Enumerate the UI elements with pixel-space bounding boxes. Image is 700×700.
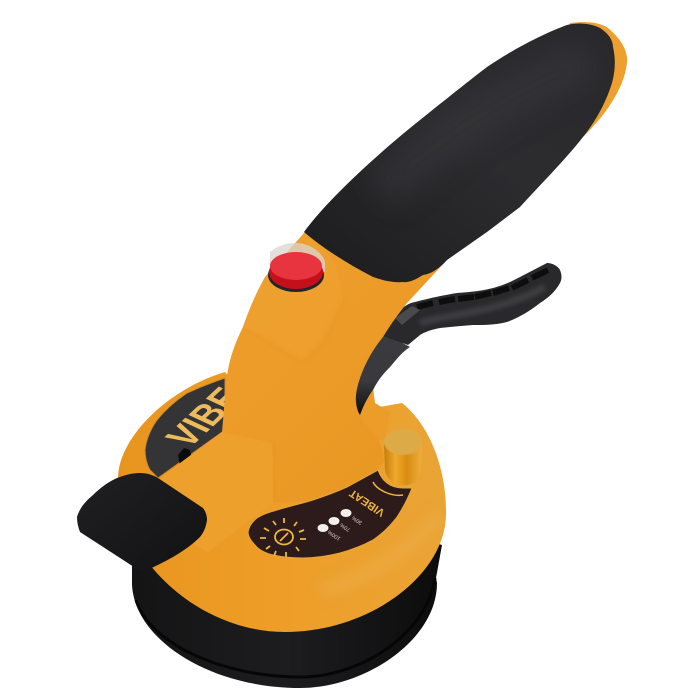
disc rim highlight xyxy=(320,515,440,590)
lever highlight xyxy=(420,287,545,323)
orange post behind neck xyxy=(356,388,390,440)
black bumper xyxy=(77,473,207,570)
grip highlight xyxy=(392,153,428,186)
neck facet xyxy=(243,232,343,362)
gold dial xyxy=(384,429,422,485)
panel brand: VIBEAT xyxy=(347,486,387,518)
glass dome xyxy=(270,243,325,272)
black grip xyxy=(304,24,615,282)
arc arrow xyxy=(373,482,403,495)
block shadow edge xyxy=(274,444,275,503)
small dark latch xyxy=(178,448,192,468)
icon: flashlight sun xyxy=(260,518,306,557)
brand text: VIBEAT xyxy=(156,353,283,453)
handle body neck xyxy=(160,232,470,552)
indicator labels: 30% xyxy=(351,514,364,525)
indicator lights xyxy=(318,509,352,532)
orange base disc xyxy=(118,372,446,632)
suction cup base xyxy=(132,500,442,688)
lever finger holes xyxy=(417,270,548,307)
product illustration: tile suction tool xyxy=(77,22,628,688)
indicator labels xyxy=(327,514,364,541)
neck crease xyxy=(243,300,343,362)
red button xyxy=(268,243,325,292)
handle end cap xyxy=(560,22,627,137)
left block xyxy=(160,432,273,552)
dark label plate with brand xyxy=(145,353,283,478)
inner black lever arm xyxy=(350,330,410,415)
indicator labels: 100% xyxy=(327,528,342,541)
control panel xyxy=(248,470,412,558)
indicator labels: 70% xyxy=(339,521,352,532)
lever xyxy=(380,263,562,345)
suction cup groove xyxy=(136,578,435,677)
